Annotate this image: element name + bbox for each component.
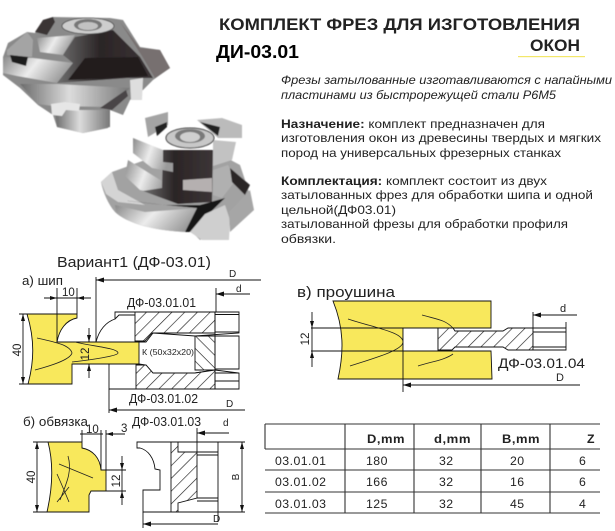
row 03.01.02: 32 xyxy=(439,475,454,489)
label: K: К (50х32х20) xyxy=(142,348,194,357)
title: ОКОН xyxy=(530,36,580,55)
row 03.01.03: 32 xyxy=(439,497,454,511)
yellow tenon profile xyxy=(27,314,139,384)
row 03.01.01: 20 xyxy=(510,454,525,468)
dimension: D xyxy=(143,512,220,528)
dimension: 12: 12 xyxy=(300,333,312,345)
table header xyxy=(367,432,595,446)
dimension: 40 xyxy=(12,314,30,384)
dimension: B xyxy=(218,442,245,512)
dimension: d: d xyxy=(560,303,566,315)
title xyxy=(216,15,585,62)
row 03.01.02: 16 xyxy=(510,475,525,489)
dimension: d: d xyxy=(223,418,229,429)
dimension: B: B xyxy=(231,473,242,480)
table header: d,mm xyxy=(434,432,471,446)
row 03.01.03: 45 xyxy=(510,497,525,511)
upper cutter section xyxy=(96,312,239,342)
label: tenon: а) шип xyxy=(22,273,63,288)
text block: intro: пластинами из быстрорежущей стали Р6М5 xyxy=(281,88,556,102)
diagram: c) slot xyxy=(297,284,586,392)
dimension: 10 xyxy=(80,424,103,470)
dimension: 12: 12 xyxy=(111,475,123,487)
diagram: b) frame xyxy=(23,414,245,528)
row 03.01.01: 03.01.01 xyxy=(275,454,326,468)
label: DF-03.01.03: ДФ-03.01.03 xyxy=(132,415,201,429)
photo: upper cutter set xyxy=(3,17,170,133)
text block: contents: цельной(ДФ03.01) xyxy=(281,203,396,217)
dimension: D: D xyxy=(213,514,220,525)
text block: purpose: изготовления окон из древесины твердых и мягких xyxy=(281,131,601,145)
text block: contents: Комплектация: комплект состоит из двух xyxy=(281,174,547,188)
text block: contents xyxy=(281,174,593,246)
table grid xyxy=(265,424,600,513)
label: DF-03.01.01: ДФ-03.01.01 xyxy=(127,296,196,310)
row 03.01.02: 6 xyxy=(579,475,586,489)
text block: contents: обвязки. xyxy=(281,232,336,246)
text block: intro xyxy=(281,73,612,102)
heading: variant 1: Вариант1 (ДФ-03.01) xyxy=(57,254,211,271)
table header: B,mm xyxy=(502,432,540,446)
dimension: upper d xyxy=(216,284,250,312)
dimension: D: D xyxy=(556,372,564,384)
row 03.01.02: 03.01.02 xyxy=(275,475,326,489)
label: slot: в) проушина xyxy=(297,284,396,301)
table header: D,mm xyxy=(367,432,405,446)
dimension: 12: 12 xyxy=(80,348,92,360)
yellow frame profile xyxy=(47,442,106,512)
row 03.01.01: 180 xyxy=(366,454,388,468)
dimension: 10: 10 xyxy=(86,424,99,436)
cutter section xyxy=(137,442,218,512)
slot opening xyxy=(403,328,438,351)
dimension: 10 xyxy=(44,287,91,342)
centre hub section xyxy=(195,336,215,370)
dimension: 12 xyxy=(300,312,403,367)
row 03.01.03: 03.01.03 xyxy=(275,497,326,511)
dimension: d xyxy=(197,418,229,452)
dimension: 12 xyxy=(106,456,126,505)
dimension: 3: 3 xyxy=(121,423,127,435)
dimension: 40 xyxy=(26,442,48,512)
dimension: upper D: D xyxy=(229,269,236,280)
slot cutter section xyxy=(438,328,566,350)
text block: purpose xyxy=(281,117,601,160)
text block: purpose: пород на универсальных фрезерных станках xyxy=(281,146,561,160)
label: DF-03.01.04: ДФ-03.01.04 xyxy=(498,356,586,371)
dimension: d xyxy=(533,303,577,328)
hub right part xyxy=(215,312,239,389)
photo: lower cutter set xyxy=(101,112,254,240)
label: frame: б) обвязка xyxy=(23,414,89,429)
dimension: upper D xyxy=(96,269,261,342)
yellow slot profile xyxy=(333,301,492,379)
dimension: 40: 40 xyxy=(12,344,24,356)
row 03.01.01: 6 xyxy=(579,454,586,468)
dimension: 12 xyxy=(80,328,92,378)
row 03.01.02 xyxy=(275,475,586,489)
dimension: upper d: d xyxy=(236,284,242,295)
text block: purpose: Назначение: комплект предназначен для xyxy=(281,117,545,131)
text block: contents: затылованной фрезы для обработки профиля xyxy=(281,217,568,231)
dimension: lower D xyxy=(109,389,245,413)
diagram: a) tenon xyxy=(12,269,261,413)
row 03.01.01: 32 xyxy=(439,454,454,468)
title: КОМПЛЕКТ ФРЕЗ ДЛЯ ИЗГОТОВЛЕНИЯ xyxy=(219,15,580,34)
dimension: 3 xyxy=(106,423,127,470)
row 03.01.03 xyxy=(275,497,586,511)
dimension: D xyxy=(403,351,580,392)
label: DF-03.01.02: ДФ-03.01.02 xyxy=(129,392,198,406)
lower cutter section xyxy=(109,364,239,389)
row 03.01.02: 166 xyxy=(366,475,388,489)
title: ДИ-03.01 xyxy=(216,42,299,62)
dimension: lower D: D xyxy=(226,399,233,410)
dimension: 10: 10 xyxy=(62,287,75,299)
text block: contents: затылованных фрез для обработки шипа и одной xyxy=(281,188,593,202)
text block: intro: Фрезы затылованные изготавливаются с напайными xyxy=(281,73,612,87)
row 03.01.03: 4 xyxy=(579,497,586,511)
table: dimensions xyxy=(265,424,600,513)
dimension: 40: 40 xyxy=(26,471,38,483)
row 03.01.01 xyxy=(275,454,586,468)
table header: Z xyxy=(587,432,595,446)
row 03.01.03: 125 xyxy=(366,497,388,511)
